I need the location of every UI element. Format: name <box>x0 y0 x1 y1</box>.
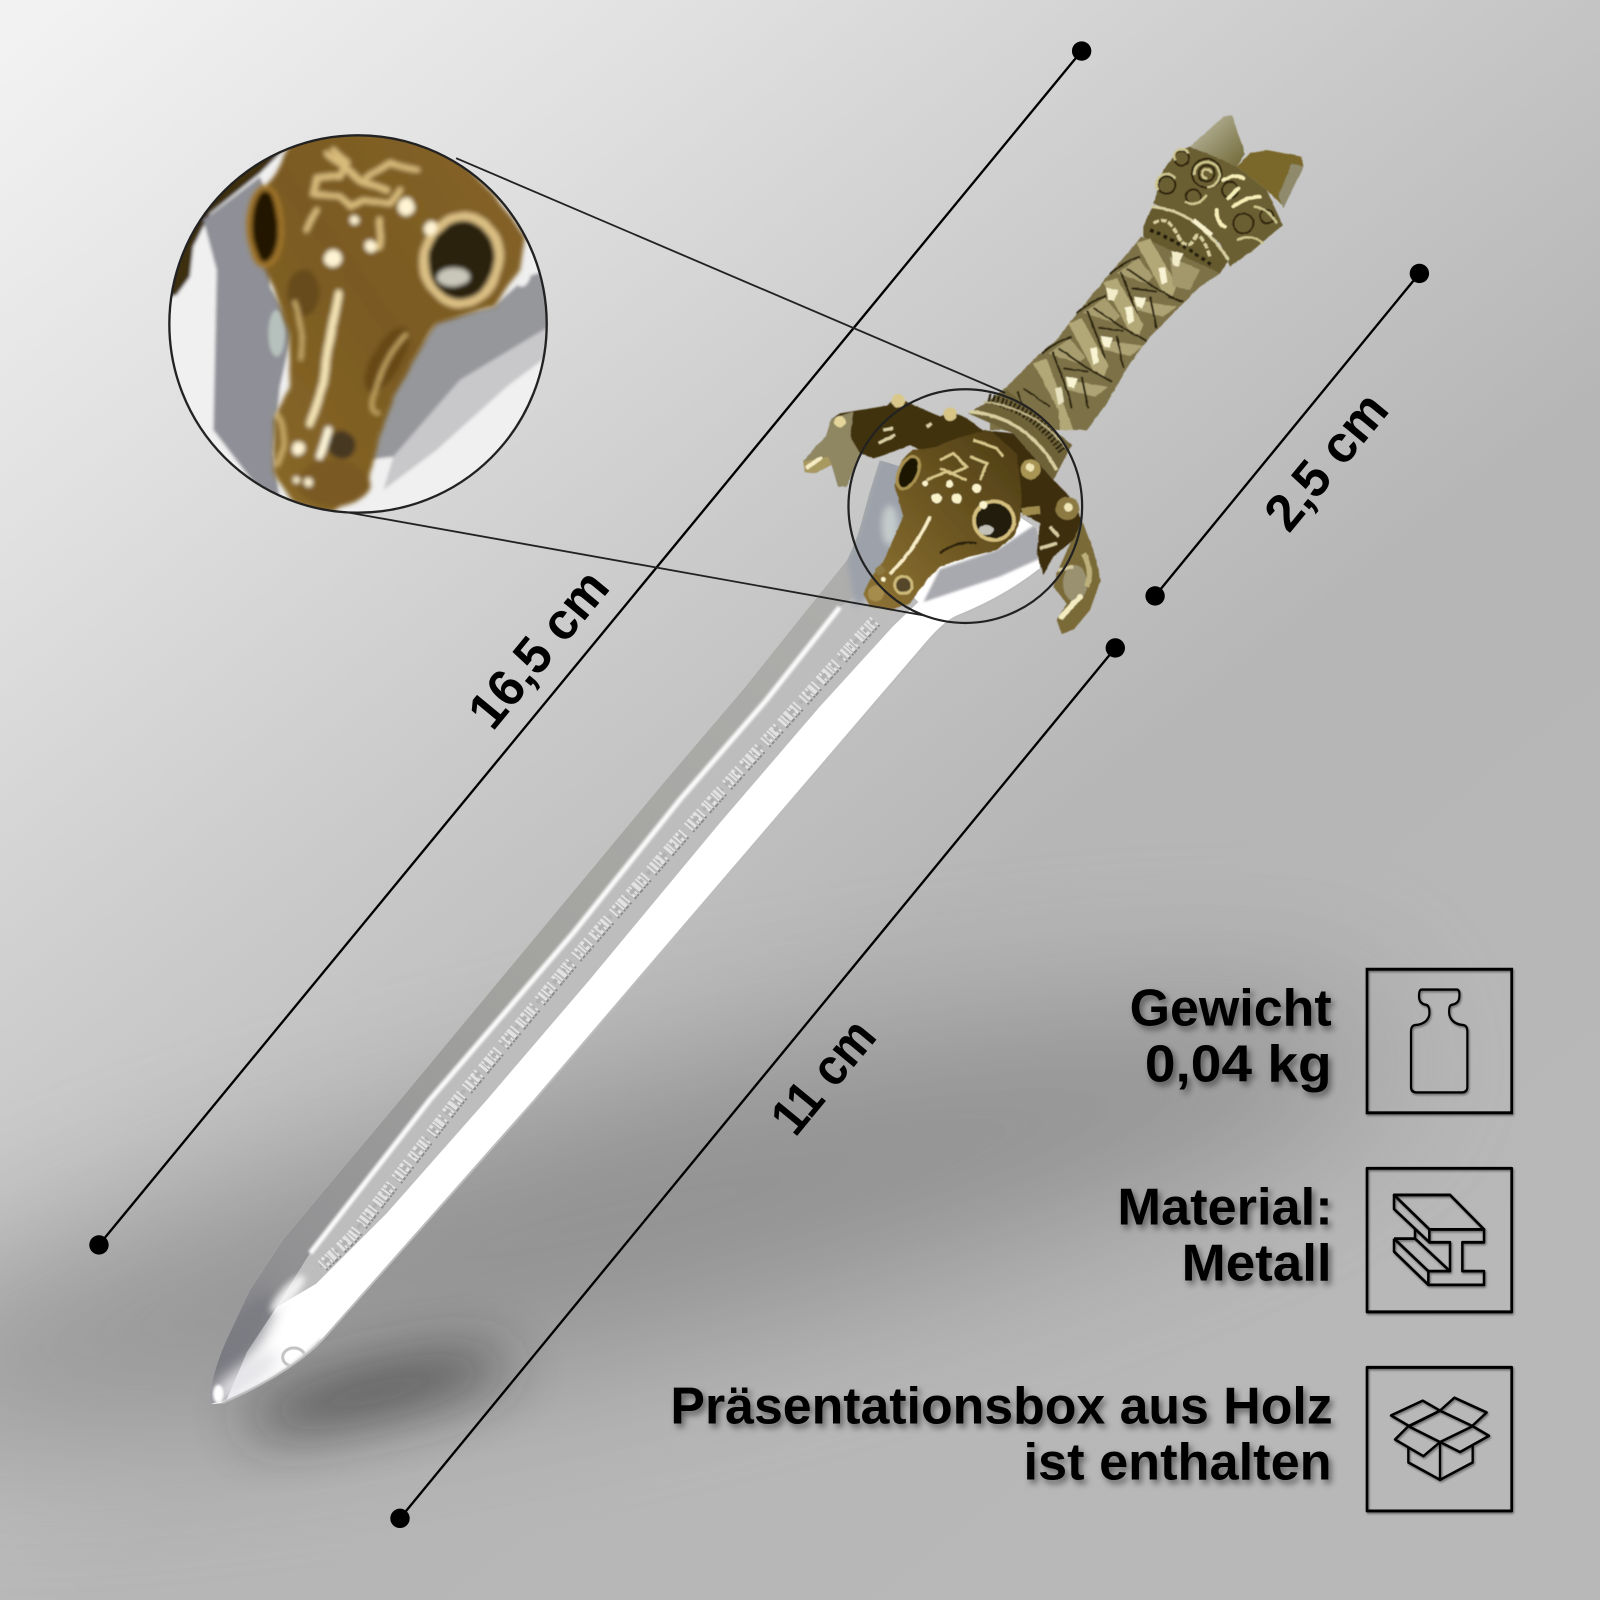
skull <box>863 430 1022 610</box>
feature text: weight: 0,04 kg <box>1145 1036 1332 1094</box>
dimension line: 16,5 cm <box>89 41 1091 1255</box>
icon: steel beam box <box>1367 1168 1512 1312</box>
grip strap unit 2 <box>1077 278 1147 368</box>
dimension line: 11 cm: 11 cm <box>760 1008 888 1146</box>
feature text: material: Material: <box>1117 1178 1333 1236</box>
icon: open box <box>1367 1367 1512 1511</box>
lens ring <box>169 135 547 513</box>
skull head <box>249 133 525 517</box>
hilt: guard and skull <box>803 390 1101 634</box>
feature text: presentation box <box>670 1377 1333 1492</box>
dimension line: 16,5 cm: 16,5 cm <box>457 559 621 740</box>
sword cast shadow <box>238 1337 517 1447</box>
guard collar <box>968 390 1072 480</box>
grip strap unit 1 <box>1110 238 1200 328</box>
left horn <box>803 394 987 487</box>
grip strap unit 3 <box>1042 318 1112 408</box>
source circle <box>848 389 1082 623</box>
blade right edge <box>222 569 1040 1403</box>
feature text: material: Metall <box>1182 1235 1332 1293</box>
blade <box>184 439 1061 1418</box>
feature text: weight: Gewicht <box>1130 980 1332 1038</box>
feature text: presentation box: Präsentationsbox aus Holz <box>670 1377 1333 1435</box>
wrapped grip <box>990 237 1220 433</box>
guard flare steel <box>847 449 1043 607</box>
grip strap unit 4 <box>1017 358 1073 433</box>
blade left bevel <box>194 449 918 1408</box>
magnifier callout <box>160 120 1082 623</box>
dimension line: 2,5 cm: 2,5 cm <box>1253 381 1400 542</box>
dimension line: 11 cm <box>390 638 1125 1528</box>
pommel wedges <box>1190 115 1303 208</box>
feature text: weight <box>1130 980 1332 1094</box>
pommel scrollwork <box>1153 147 1283 267</box>
hilt: grip and pommel <box>990 115 1303 433</box>
sword illustration <box>184 115 1303 1418</box>
fuller with engraving <box>277 571 918 1307</box>
connector lines <box>347 158 1005 615</box>
enlarged skull detail <box>160 120 560 520</box>
pommel lower band <box>1143 205 1228 287</box>
feature text: presentation box: ist enthalten <box>1023 1434 1332 1492</box>
icon: weight box <box>1367 969 1512 1113</box>
blade tip shading <box>209 1272 322 1404</box>
feature text: material <box>1117 1178 1333 1293</box>
dimension line: 2,5 cm <box>1145 264 1429 606</box>
right guard mass and wing <box>983 430 1101 634</box>
